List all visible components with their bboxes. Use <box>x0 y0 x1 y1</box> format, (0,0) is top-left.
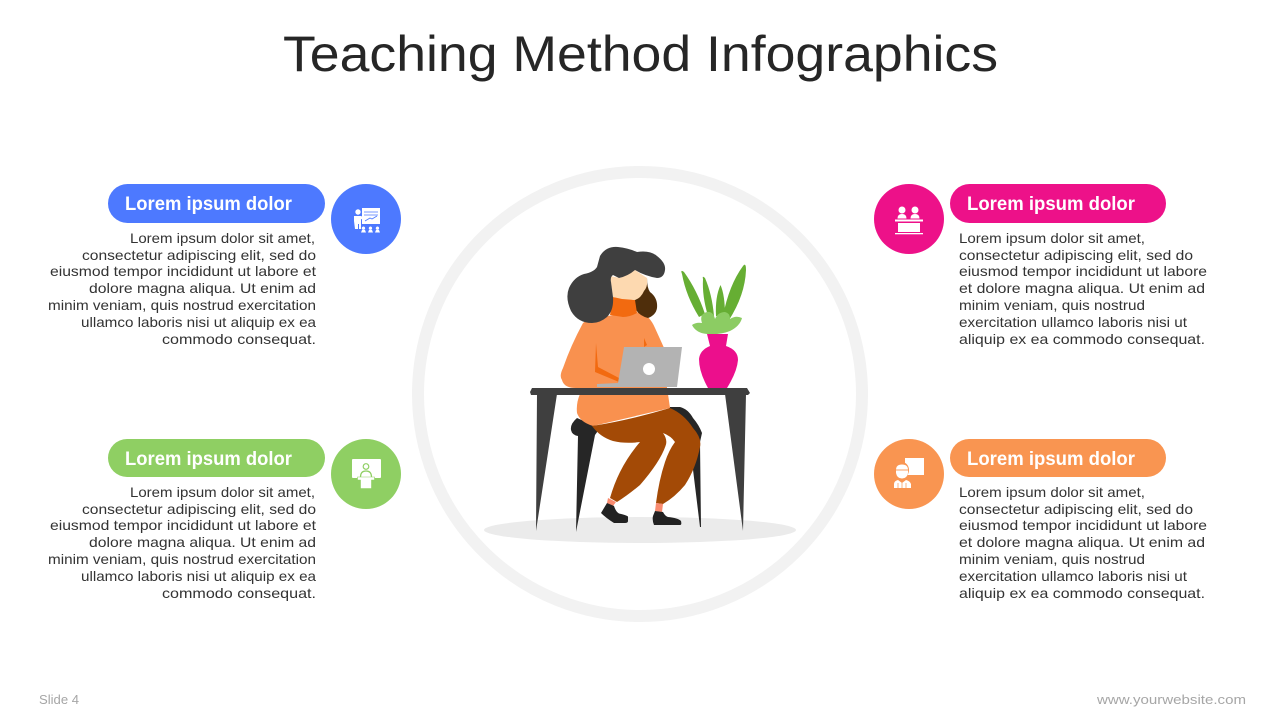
vase <box>699 334 738 388</box>
laptop <box>597 347 682 387</box>
upper torso <box>561 312 667 388</box>
text block: eiusmod tempor incididunt ut labore <box>959 517 1207 533</box>
text block: minim veniam, quis nostrud exercitation <box>48 297 316 313</box>
text block: et dolore magna aliqua. Ut enim ad <box>959 280 1205 296</box>
icon: teacher at presentation board <box>331 184 401 254</box>
text block: minim veniam, quis nostrud <box>959 551 1145 567</box>
title: Teaching Method Infographics <box>283 26 998 82</box>
panel: orange bottom-right <box>874 439 1207 601</box>
text block <box>959 230 1207 347</box>
text block: consectetur adipiscing elit, sed do <box>959 501 1193 517</box>
floor shadow <box>484 517 796 543</box>
plant foliage <box>692 312 742 334</box>
heading pill <box>950 184 1166 223</box>
heading pill: Lorem ipsum dolor <box>125 448 292 470</box>
text block <box>48 484 316 601</box>
text block: Lorem ipsum dolor sit amet, <box>130 484 315 500</box>
lower torso <box>577 394 670 426</box>
text block: exercitation ullamco laboris nisi ut <box>959 568 1187 584</box>
heading pill <box>108 184 325 223</box>
text block: commodo consequat. <box>162 585 316 601</box>
text block: ullamco laboris nisi ut aliquip ex ea <box>81 314 316 330</box>
footer: slide number: Slide 4 <box>39 692 79 707</box>
icon: teacher with board <box>874 439 944 509</box>
table top <box>530 388 750 395</box>
plant leaves <box>681 265 746 320</box>
heading pill <box>108 439 325 477</box>
text block: ullamco laboris nisi ut aliquip ex ea <box>81 568 316 584</box>
text block: consectetur adipiscing elit, sed do <box>82 247 316 263</box>
panel: green bottom-left <box>48 439 401 601</box>
text block: commodo consequat. <box>162 331 316 347</box>
text block <box>48 230 316 347</box>
text block: eiusmod tempor incididunt ut labore <box>959 263 1207 279</box>
text block: exercitation ullamco laboris nisi ut <box>959 314 1187 330</box>
heading pill: Lorem ipsum dolor <box>967 193 1135 215</box>
text block: Lorem ipsum dolor sit amet, <box>130 230 315 246</box>
text block: consectetur adipiscing elit, sed do <box>82 501 316 517</box>
illustration: woman at desk with plant <box>484 247 796 543</box>
arm shading <box>595 338 647 382</box>
text block: eiusmod tempor incididunt ut labore et <box>50 263 316 279</box>
text block: Lorem ipsum dolor sit amet, <box>959 230 1145 246</box>
text block: consectetur adipiscing elit, sed do <box>959 247 1193 263</box>
text block: minim veniam, quis nostrud <box>959 297 1145 313</box>
central ring <box>418 172 862 616</box>
text block: eiusmod tempor incididunt ut labore et <box>50 517 316 533</box>
heading pill <box>950 439 1166 477</box>
heading pill: Lorem ipsum dolor <box>125 193 292 215</box>
text block: et dolore magna aliqua. Ut enim ad <box>959 534 1205 550</box>
text block: dolore magna aliqua. Ut enim ad <box>89 280 316 296</box>
text block: aliquip ex ea commodo consequat. <box>959 331 1205 347</box>
back hair <box>634 278 657 318</box>
icon: speaker at podium <box>331 439 401 509</box>
text block: Lorem ipsum dolor sit amet, <box>959 484 1145 500</box>
hair <box>567 247 665 323</box>
trousers <box>592 408 700 504</box>
socks <box>607 498 663 512</box>
shoes <box>601 503 681 525</box>
face <box>610 270 647 300</box>
text block: dolore magna aliqua. Ut enim ad <box>89 534 316 550</box>
text block: minim veniam, quis nostrud exercitation <box>48 551 316 567</box>
panel: pink top-right <box>874 184 1207 347</box>
panel: blue top-left <box>48 184 401 347</box>
stool <box>571 407 702 532</box>
footer: website: www.yourwebsite.com <box>1096 692 1246 707</box>
table legs <box>536 394 746 531</box>
text block: aliquip ex ea commodo consequat. <box>959 585 1205 601</box>
text block <box>959 484 1207 601</box>
heading pill: Lorem ipsum dolor <box>967 448 1135 470</box>
scarf <box>610 297 637 317</box>
icon: two people at desk <box>874 184 944 254</box>
